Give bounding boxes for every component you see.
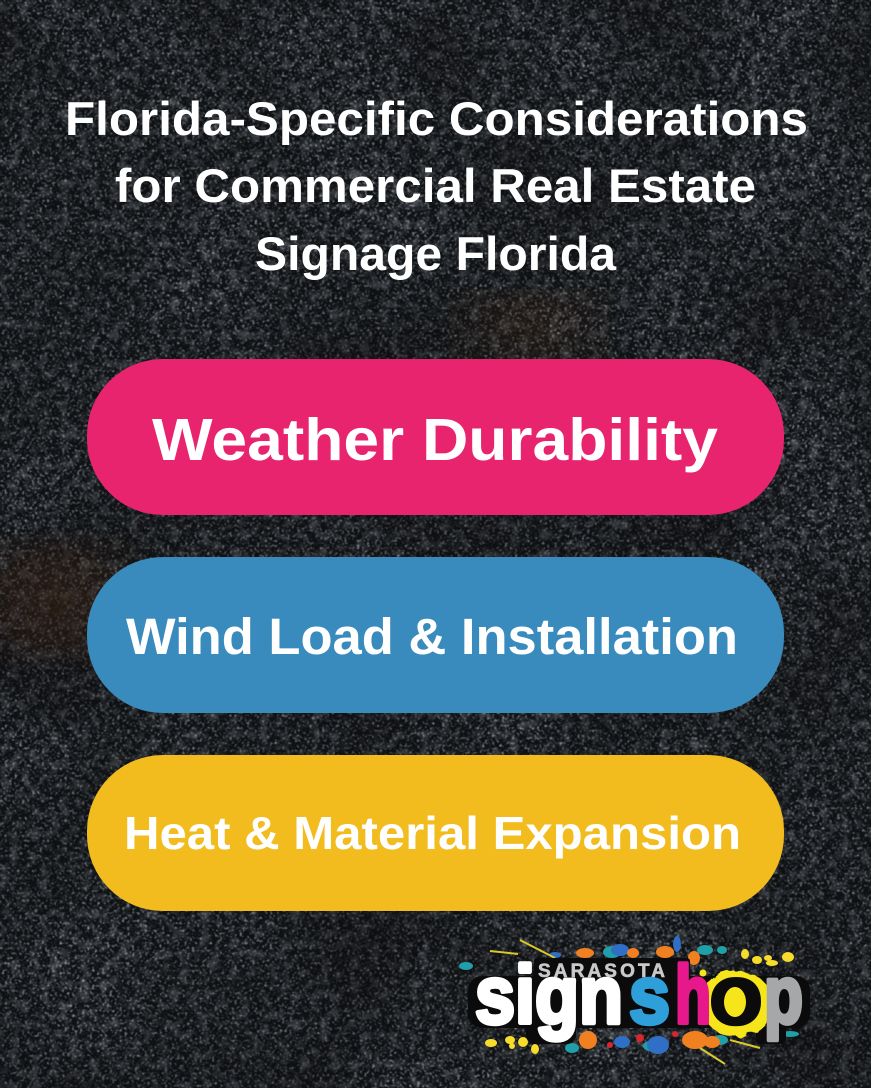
logo yellow splat xyxy=(701,971,773,1037)
logo: Sarasota Sign Shop xyxy=(459,936,810,1064)
logo black backing xyxy=(468,958,810,1044)
pill: Heat & Material Expansion xyxy=(87,755,784,911)
logo SARASOTA: SARASOTA xyxy=(538,961,665,982)
logo wordmark: o xyxy=(710,950,762,1041)
logo wordmark: h xyxy=(675,950,711,1041)
title xyxy=(65,92,808,280)
pill: Wind Load & Installation xyxy=(87,557,784,713)
pill: Weather Durability: Weather Durability xyxy=(152,407,718,473)
pill: Heat & Material Expansion: Heat & Material Expansion xyxy=(124,807,741,859)
title: Florida-Specific Considerations xyxy=(65,92,808,145)
title: Signage Florida xyxy=(255,227,617,280)
logo wordmark xyxy=(475,950,803,1041)
pill: Wind Load & Installation: Wind Load & Installation xyxy=(126,608,738,665)
logo yellow o centre xyxy=(724,987,746,1017)
logo wordmark: s xyxy=(629,950,670,1041)
logo wordmark: sign xyxy=(475,950,623,1041)
logo wordmark: p xyxy=(764,950,803,1041)
pill: Weather Durability xyxy=(87,359,784,515)
title: for Commercial Real Estate xyxy=(115,159,756,212)
logo paint splatter xyxy=(459,936,799,1064)
